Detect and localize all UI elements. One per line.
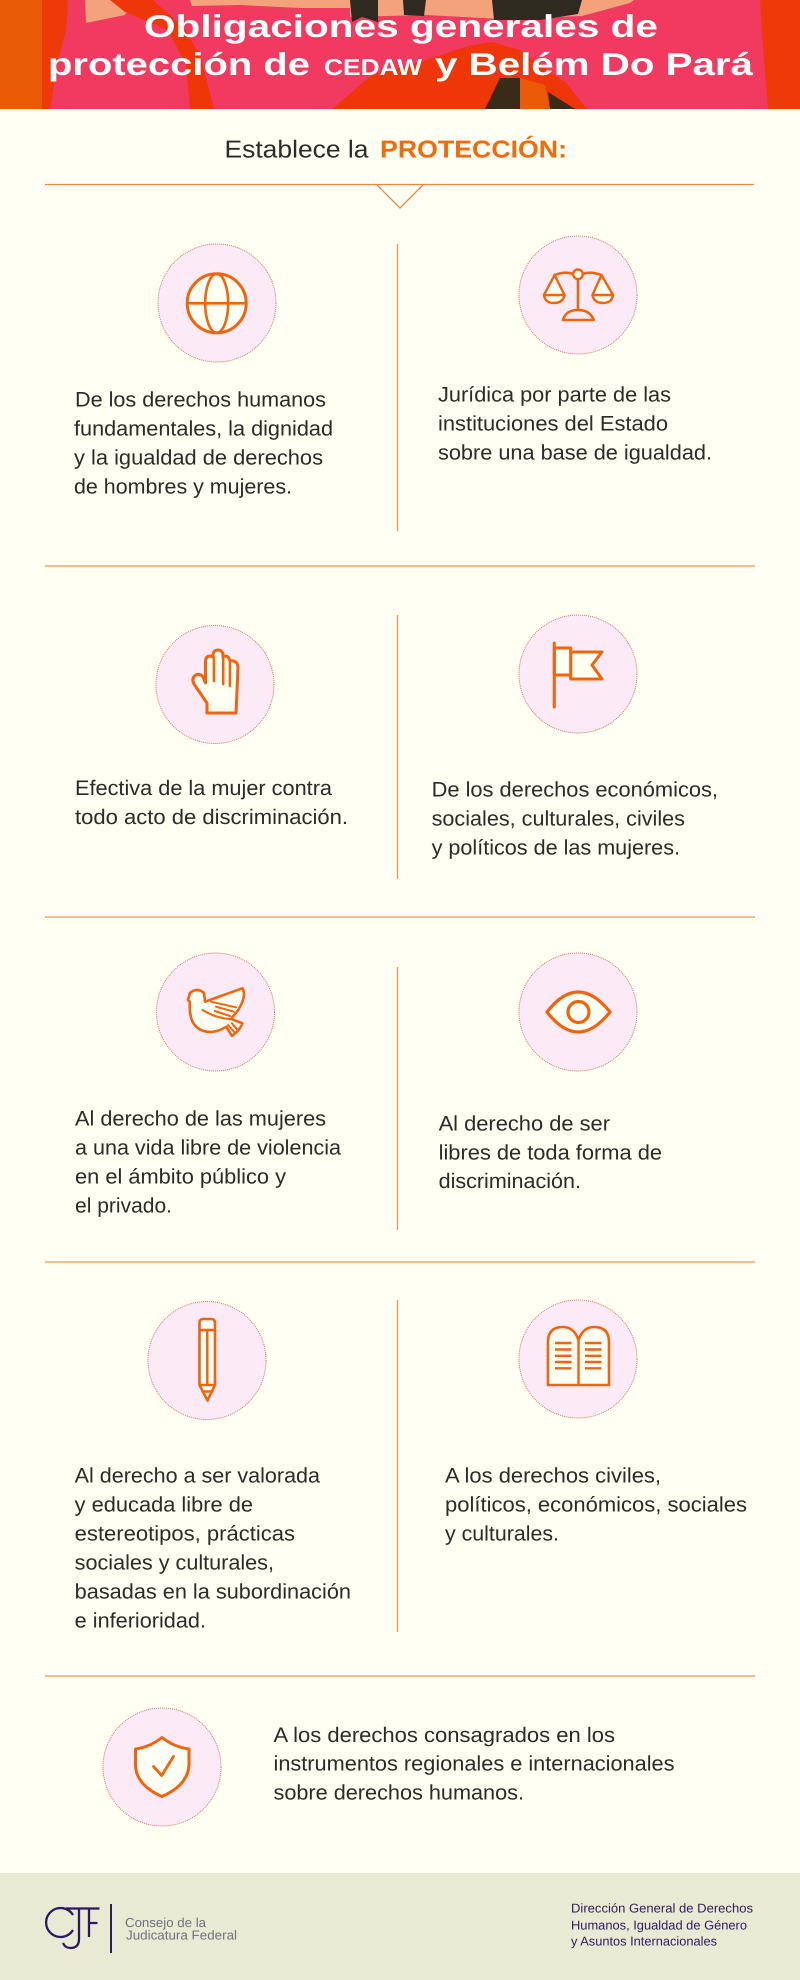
text: dignity: De los derechos humanos	[75, 389, 326, 412]
text: free from discrimination: Al derecho de ser	[439, 1113, 610, 1136]
text: civil rights	[445, 1465, 747, 1545]
text: life free of violence: Al derecho de las mujeres	[75, 1108, 326, 1131]
logo: CJF: Judicatura Federal	[126, 1928, 237, 1942]
icon: book	[519, 1300, 637, 1418]
footer credit	[571, 1901, 753, 1949]
icon: dove	[156, 953, 274, 1071]
text: regional instruments: instrumentos regionales e internacionales	[274, 1753, 674, 1776]
icon: shield	[103, 1708, 221, 1826]
text: regional instruments: A los derechos consagrados en los	[274, 1724, 615, 1747]
text: stereotypes: y educada libre de	[75, 1494, 253, 1517]
text: regional instruments	[274, 1724, 674, 1804]
panel: stereotypes	[75, 1302, 351, 1632]
text: economic rights: sociales, culturales, civiles	[432, 808, 685, 831]
title: y Belém Do Pará	[435, 46, 754, 82]
section heading: PROTECCIÓN:	[380, 135, 567, 163]
text: regional instruments: sobre derechos humanos.	[274, 1781, 524, 1804]
title: CEDAW	[324, 54, 422, 80]
text: free from discrimination	[439, 1113, 662, 1193]
panel: life free of violence	[75, 953, 341, 1217]
text: dignity: fundamentales, la dignidad	[74, 418, 333, 441]
icon: pencil	[148, 1302, 266, 1420]
title: protección de	[48, 46, 310, 82]
text: stereotypes: basadas en la subordinación	[75, 1580, 351, 1603]
icon: scales	[519, 236, 637, 354]
footer band	[0, 1873, 800, 1980]
text: dignity: de hombres y mujeres.	[74, 475, 292, 498]
text: dignity	[74, 389, 333, 498]
text: civil rights: políticos, económicos, sociales	[445, 1494, 747, 1517]
panel: discrimination	[75, 626, 348, 829]
text: free from discrimination: discriminación.	[439, 1170, 581, 1193]
icon: flag	[519, 615, 637, 733]
icon: globe	[158, 244, 276, 362]
text: life free of violence	[75, 1108, 341, 1217]
panel: regional instruments	[103, 1708, 674, 1826]
panel: dignity	[74, 244, 333, 498]
footer credit: y Asuntos Internacionales	[571, 1934, 717, 1949]
logo: CJF: Consejo de la	[125, 1915, 207, 1930]
text: economic rights: De los derechos económicos,	[432, 779, 718, 802]
text: economic rights: y políticos de las mujeres.	[432, 836, 680, 859]
icon: hand	[156, 626, 274, 744]
title	[48, 8, 754, 82]
logo: CJF	[46, 1904, 237, 1953]
text: legal: Jurídica por parte de las	[438, 384, 671, 407]
text: discrimination: todo acto de discriminación.	[75, 806, 348, 829]
section heading: Establece la	[224, 136, 369, 163]
text: civil rights: A los derechos civiles,	[445, 1465, 661, 1488]
heading divider with arrow	[45, 184, 754, 208]
text: life free of violence: el privado.	[75, 1194, 172, 1217]
text: stereotypes: Al derecho a ser valorada	[75, 1465, 320, 1488]
text: legal: instituciones del Estado	[438, 413, 668, 436]
text: life free of violence: a una vida libre de violencia	[75, 1136, 341, 1159]
icon: eye	[519, 953, 637, 1071]
panel: civil rights	[445, 1300, 747, 1545]
text: free from discrimination: libres de toda forma de	[439, 1141, 662, 1164]
panel: economic rights	[432, 615, 718, 859]
text: discrimination	[75, 777, 348, 829]
title: Obligaciones generales de	[144, 8, 658, 44]
panel: legal	[438, 236, 712, 464]
text: stereotypes: estereotipos, prácticas	[75, 1522, 295, 1545]
text: dignity: y la igualdad de derechos	[74, 446, 323, 469]
footer credit: Dirección General de Derechos	[571, 1901, 753, 1916]
text: stereotypes	[75, 1465, 351, 1632]
text: legal: sobre una base de igualdad.	[438, 441, 712, 464]
text: legal	[438, 384, 712, 464]
text: discrimination: Efectiva de la mujer contra	[75, 777, 332, 800]
text: stereotypes: e inferioridad.	[75, 1609, 206, 1632]
footer credit: Humanos, Igualdad de Género	[571, 1917, 747, 1932]
text: life free of violence: en el ámbito público y	[75, 1165, 287, 1188]
text: economic rights	[432, 779, 718, 859]
text: civil rights: y culturales.	[445, 1522, 559, 1545]
text: stereotypes: sociales y culturales,	[75, 1551, 274, 1574]
header banner	[0, 0, 800, 109]
section heading	[224, 135, 567, 163]
panel: free from discrimination	[439, 953, 662, 1193]
